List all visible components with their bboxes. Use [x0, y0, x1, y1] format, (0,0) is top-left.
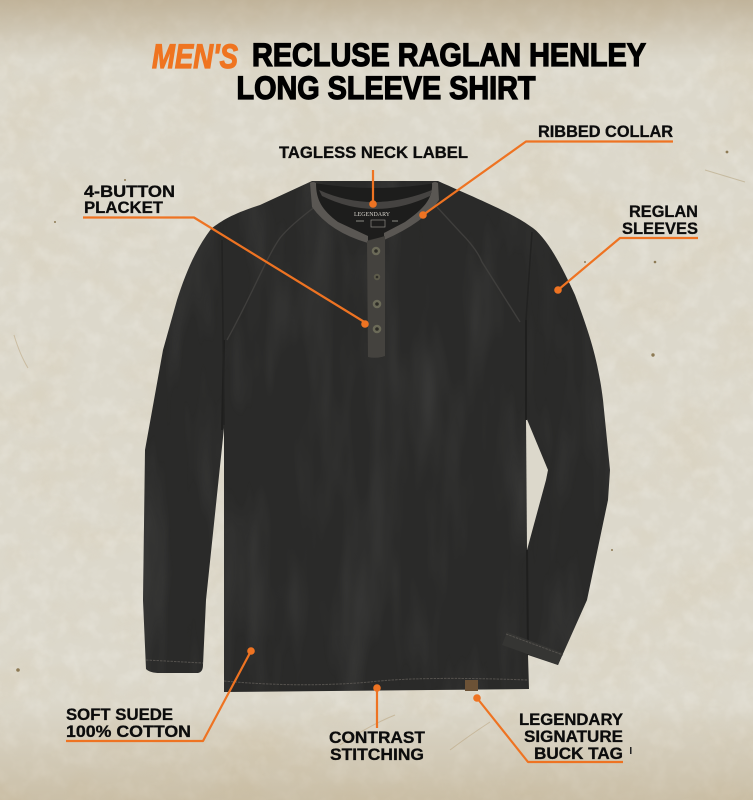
- callout: ribbed collar: [419, 123, 673, 219]
- shirt body silhouette: [143, 181, 610, 692]
- callout: reglan sleeves: [554, 203, 698, 294]
- callout: soft suede cotton: [66, 647, 255, 741]
- callout: reglan sleeves: REGLAN: [629, 203, 698, 221]
- raglan seams: [227, 206, 316, 340]
- callout: 4-button placket: [83, 183, 369, 328]
- placket: [367, 236, 385, 358]
- callout: reglan sleeves: SLEEVES: [622, 220, 698, 238]
- callout: 4-button placket: 4-BUTTON: [84, 183, 175, 201]
- cuff stitching: [146, 634, 563, 663]
- title line 2: LONG SLEEVE SHIRT: [236, 70, 536, 106]
- callout: tagless neck label: TAGLESS NECK LABEL: [279, 144, 468, 162]
- buck tag: [465, 680, 478, 691]
- title: [152, 37, 646, 106]
- shirt illustration: [140, 175, 615, 695]
- right cuff band: [502, 632, 563, 665]
- hem stitching: [224, 678, 528, 685]
- buttons: [372, 247, 381, 333]
- callout: tagless neck label: [279, 144, 468, 208]
- callout: ribbed collar: RIBBED COLLAR: [538, 123, 673, 141]
- neck label: LEGENDARY: [354, 211, 390, 218]
- callout: buck tag: SIGNATURE: [524, 728, 623, 746]
- callout: buck tag: BUCK TAG: [534, 745, 623, 763]
- title line 1: RECLUSE RAGLAN HENLEY: [252, 37, 646, 73]
- right gap shadow: [526, 417, 548, 550]
- callout: soft suede cotton: 100% COTTON: [66, 723, 191, 741]
- callout: contrast stitching: [329, 684, 425, 764]
- neck interior: [314, 183, 437, 240]
- title word: MEN'S: MEN'S: [152, 38, 238, 76]
- callout: contrast stitching: CONTRAST: [329, 729, 425, 747]
- callout: buck tag: LEGENDARY: [519, 711, 623, 729]
- collar rib: [310, 182, 439, 243]
- callout: 4-button placket: PLACKET: [84, 199, 163, 217]
- neck label: [354, 211, 398, 227]
- callout: soft suede cotton: SOFT SUEDE: [66, 706, 173, 724]
- back collar band: [319, 190, 432, 209]
- callout: contrast stitching: STITCHING: [330, 746, 424, 764]
- callout: buck tag: [473, 694, 623, 763]
